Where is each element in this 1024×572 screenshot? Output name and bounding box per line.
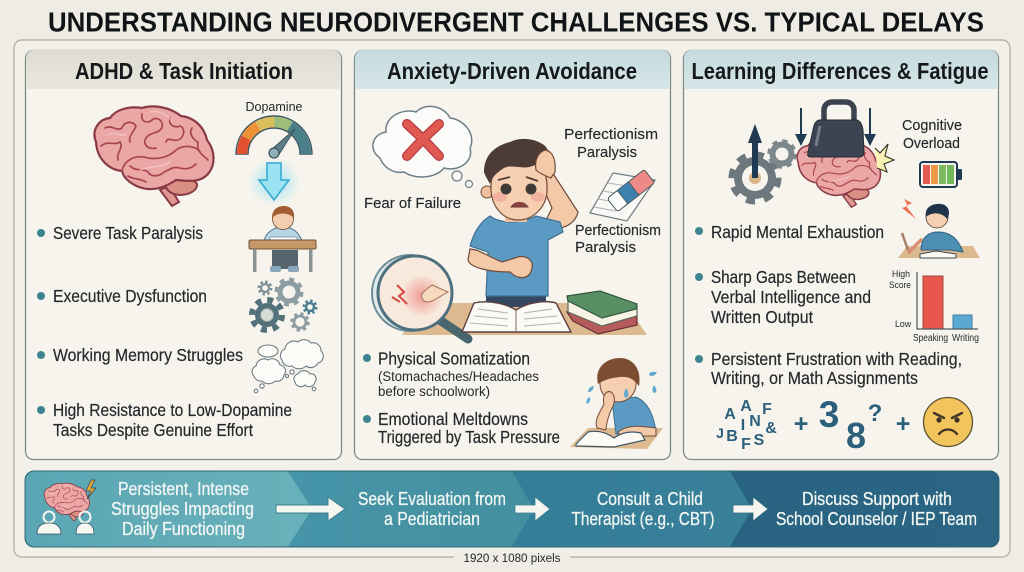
panel heading: learning — [684, 50, 998, 89]
text: cognitive overload — [902, 117, 962, 152]
step 2 text — [358, 489, 506, 529]
icon: thought clouds — [252, 340, 323, 393]
icon: down arrows — [795, 108, 876, 146]
step 1 background — [26, 472, 312, 546]
icon: crying boy — [570, 358, 663, 449]
icon: scrambled letters: F — [762, 401, 772, 418]
text: perfectionism paralysis lower: Perfectionism — [575, 222, 661, 239]
bullet: physical somatization: Physical Somatization — [378, 348, 530, 368]
icon: plus: + — [896, 410, 910, 438]
icon: battery — [920, 162, 962, 187]
text: cognitive overload: Cognitive — [902, 117, 962, 134]
illustration: table with books — [402, 303, 647, 335]
icon: scrambled numbers: 3 — [819, 394, 839, 435]
bullet: working memory: Working Memory Struggles — [53, 345, 243, 365]
icon: scrambled letters: A — [740, 398, 752, 415]
bullet: high resistance — [37, 400, 292, 440]
icon: gears — [252, 280, 316, 330]
bullet: physical somatization — [363, 348, 539, 399]
step 3 background — [400, 472, 752, 546]
arrow 3 — [733, 497, 768, 521]
icon: gears with up arrow — [732, 124, 794, 201]
bullet: executive dysfunction: Executive Dysfunction — [53, 286, 207, 306]
bullet: sharp gaps: Verbal Intelligence and — [711, 287, 871, 307]
step 3 text — [572, 489, 714, 529]
bar chart: speaking vs writing: Writing — [952, 333, 979, 344]
arrow 2 — [515, 497, 550, 521]
icon: tired student — [898, 204, 980, 258]
bullet: rapid mental exhaustion: Rapid Mental Exhaustion — [711, 222, 884, 242]
text: fear of failure: Fear of Failure — [364, 195, 461, 212]
illustration: worried boy — [468, 139, 578, 307]
step 4 text: Discuss Support with — [802, 489, 952, 509]
step 4 text — [776, 489, 977, 529]
bar chart: speaking vs writing — [889, 269, 979, 344]
bullet: emotional meltdowns — [363, 409, 560, 447]
step 3 text: Therapist (e.g., CBT) — [572, 509, 714, 529]
text: perfectionism paralysis top — [564, 126, 658, 161]
text: perfectionism paralysis lower: Paralysis — [575, 239, 636, 256]
bar chart: speaking vs writing: High — [892, 269, 910, 280]
bar chart: speaking vs writing: Low — [895, 319, 911, 330]
panel heading: anxiety: Anxiety-Driven Avoidance — [387, 58, 637, 84]
bullet: persistent frustration: Writing, or Math Assignments — [711, 368, 918, 388]
step 1 text: Persistent, Intense — [118, 479, 249, 499]
panel: ADHD & Task Initiation — [26, 50, 342, 460]
bullet: sharp gaps: Sharp Gaps Between — [711, 267, 856, 287]
bullet: high resistance: Tasks Despite Genuine Effort — [53, 420, 253, 440]
icon: student at desk — [249, 206, 316, 272]
title: UNDERSTANDING NEURODIVERGENT CHALLENGES VS. TYPICAL DELAYS — [48, 6, 984, 38]
icon: thought cloud with X — [373, 106, 472, 188]
icon: frustrated face — [924, 398, 972, 446]
icon: scrambled letters: F — [741, 436, 751, 453]
icon: brain — [94, 106, 214, 206]
text: perfectionism paralysis lower — [575, 222, 661, 256]
icon: scrambled numbers: ? — [868, 400, 882, 427]
icon: scrambled letters: S — [754, 432, 765, 449]
process flow band — [25, 471, 999, 547]
icon: scrambled letters: J — [716, 425, 724, 441]
step 2 text: Seek Evaluation from — [358, 489, 506, 509]
step 1 text: Daily Functioning — [122, 519, 245, 539]
footer caption: 1920 x 1080 pixels — [464, 553, 561, 565]
icon: scrambled letters: & — [765, 420, 777, 437]
icon: scrambled numbers — [819, 394, 882, 456]
icon: scrambled letters: N — [749, 413, 761, 430]
icon: open book — [462, 302, 571, 332]
panel heading: learning: Learning Differences & Fatigue — [692, 58, 988, 84]
step 3 text: Consult a Child — [597, 489, 703, 509]
icon: kettlebell weight — [808, 102, 864, 157]
icon: scrambled letters: B — [726, 428, 738, 445]
text: perfectionism paralysis top: Paralysis — [577, 144, 637, 161]
icon: scrambled letters: I — [741, 417, 745, 434]
text: perfectionism paralysis top: Perfectionism — [564, 126, 658, 143]
icon: scrambled letters: A — [724, 406, 736, 423]
step 1 text: Struggles Impacting — [111, 499, 254, 519]
step 4 text: School Counselor / IEP Team — [776, 509, 977, 529]
panel: Anxiety-Driven Avoidance — [354, 50, 670, 460]
bullet: sharp gaps: Written Output — [711, 307, 813, 327]
bullet: physical somatization: before schoolwork) — [378, 383, 490, 399]
bullet: persistent frustration: Persistent Frustration with Reading, — [711, 349, 962, 369]
bar chart: speaking vs writing: Speaking — [913, 333, 948, 344]
panel heading: anxiety — [355, 50, 670, 89]
panel heading: ADHD — [26, 50, 341, 89]
text: cognitive overload: Overload — [903, 135, 960, 152]
panel heading: ADHD: ADHD & Task Initiation — [75, 58, 293, 84]
icon: plus: + — [794, 410, 808, 438]
icon: down arrow — [248, 158, 300, 206]
step 1 text — [111, 479, 254, 539]
step 2 text: a Pediatrician — [384, 509, 480, 529]
icon: scrambled letters — [716, 398, 777, 453]
icon: scrambled numbers: 8 — [846, 415, 866, 456]
bullet: emotional meltdowns: Emotional Meltdowns — [378, 409, 528, 429]
icon: lightning — [902, 199, 916, 219]
icon: book stack — [567, 291, 637, 334]
icon: magnifier — [372, 255, 468, 339]
bullet: persistent frustration — [695, 349, 962, 388]
icon: dopamine gauge — [236, 116, 312, 158]
icon: spark — [875, 144, 894, 172]
bullet: severe task paralysis: Severe Task Paralysis — [53, 223, 203, 243]
panel: Learning Differences & Fatigue — [684, 50, 998, 460]
step 2 background — [200, 472, 534, 546]
bar chart: speaking vs writing: Score — [889, 280, 911, 291]
bullet: physical somatization: (Stomachaches/Headaches — [378, 368, 539, 384]
icon: paper and eraser — [590, 170, 655, 221]
bullet: sharp gaps — [695, 267, 871, 327]
arrow 1 — [276, 497, 345, 521]
icon: brain and people — [37, 480, 96, 534]
text: dopamine label: Dopamine — [246, 100, 303, 114]
bullet: emotional meltdowns: Triggered by Task Pressure — [378, 427, 560, 447]
bullet: high resistance: High Resistance to Low-Dopamine — [53, 400, 292, 420]
icon: overloaded brain — [797, 138, 880, 207]
